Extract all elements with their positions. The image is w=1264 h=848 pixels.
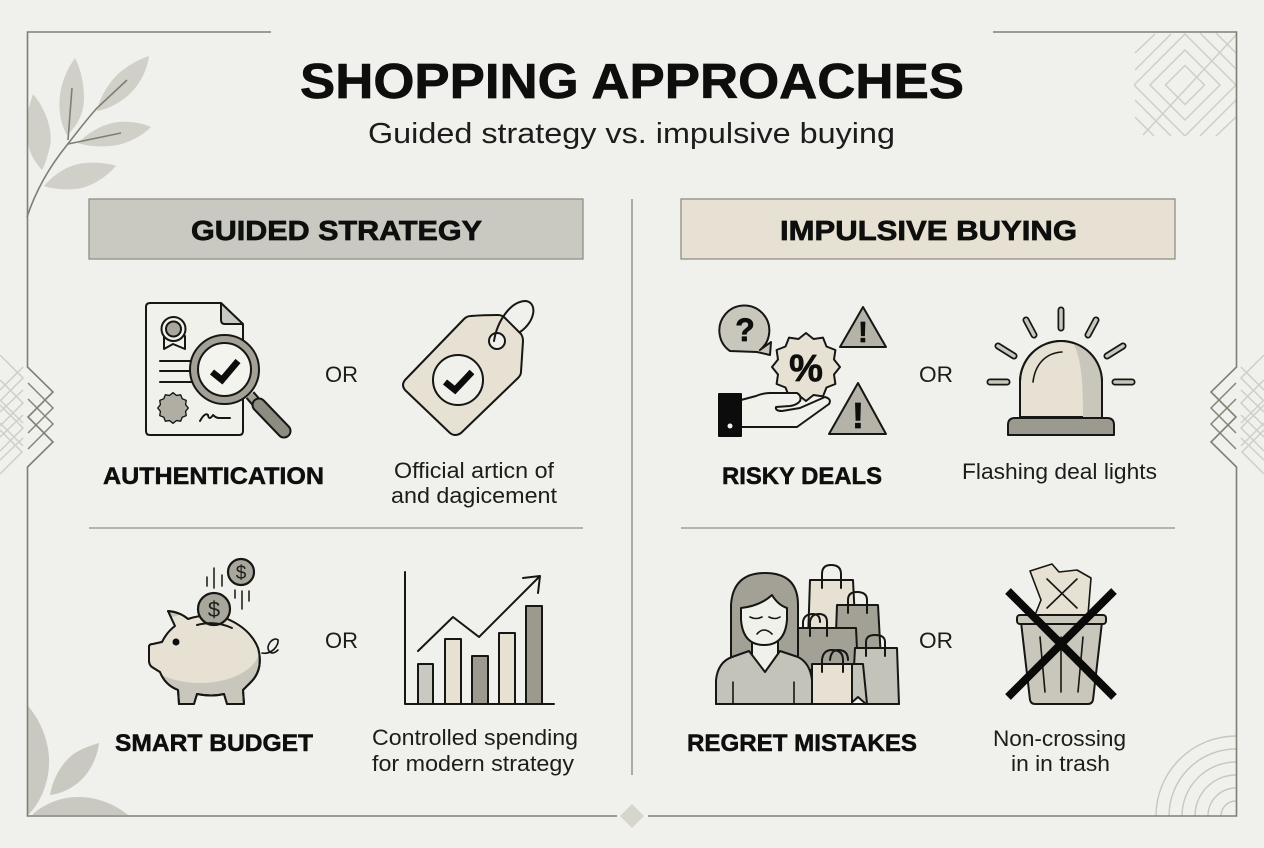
text: non-crossing trash: in in trash: [1011, 751, 1110, 776]
decoration: light lattice right edge: [1241, 355, 1264, 474]
panel: guided strategy: [89, 199, 584, 776]
icon: risky deal hand with warnings: [719, 306, 886, 436]
title: SHOPPING APPROACHES: [300, 55, 964, 109]
chart: rising bars with arrow: [405, 572, 554, 704]
decoration: zigzag chevrons right edge: [1211, 383, 1236, 449]
header: impulsive buying: IMPULSIVE BUYING: [780, 215, 1077, 246]
label: risky deals: RISKY DEALS: [722, 463, 882, 490]
header: guided strategy: GUIDED STRATEGY: [191, 215, 482, 246]
text: flashing deal lights: Flashing deal lights: [962, 459, 1157, 484]
center divider: [631, 199, 633, 775]
icon: piggy bank with coins: $: [208, 597, 220, 622]
icon: document under magnifier: [146, 303, 284, 435]
label: or: OR: [325, 628, 358, 653]
decoration: diamond lattice top right: [1134, 33, 1236, 136]
icon: flashing siren: [990, 310, 1132, 435]
label: or: OR: [325, 362, 358, 387]
icon: crossed out trash can: [1008, 564, 1114, 704]
header: impulsive buying: [681, 199, 1175, 259]
text: controlled spending: Controlled spending: [372, 725, 578, 750]
icon: risky deal hand with warnings: %: [789, 348, 823, 390]
icon: risky deal hand with warnings: ?: [735, 312, 755, 348]
label: regret mistakes: REGRET MISTAKES: [687, 730, 917, 757]
text: official description: Official articn of: [394, 458, 555, 483]
label: authentication: AUTHENTICATION: [103, 463, 324, 490]
text: controlled spending: for modern strategy: [372, 751, 574, 776]
icon: price tag with check: [403, 301, 533, 435]
decoration: concentric arcs bottom right: [1156, 736, 1236, 816]
label: or: OR: [919, 628, 953, 653]
decoration: light lattice left edge: [0, 355, 23, 474]
icon: risky deal hand with warnings: !: [852, 395, 864, 436]
decoration: zigzag chevrons left edge: [28, 383, 53, 449]
decoration: bottom diamond: [620, 804, 644, 828]
icon: risky deal hand with warnings: !: [858, 317, 868, 349]
text: non-crossing trash: Non-crossing: [993, 726, 1126, 751]
panel: impulsive buying: [681, 199, 1175, 776]
header: guided strategy: [89, 199, 583, 259]
label: smart budget: SMART BUDGET: [115, 730, 313, 757]
decoration: leaf sprig top left: [27, 56, 151, 217]
icon: piggy bank with coins: [140, 559, 278, 704]
icon: regretful shopper with bags: [716, 565, 899, 704]
label: or: OR: [919, 362, 953, 387]
decoration: leaves bottom left: [28, 706, 128, 815]
text: official description: and dagicement: [391, 483, 557, 508]
subtitle: Guided strategy vs. impulsive buying: [368, 118, 895, 150]
icon: piggy bank with coins: $: [236, 563, 247, 584]
